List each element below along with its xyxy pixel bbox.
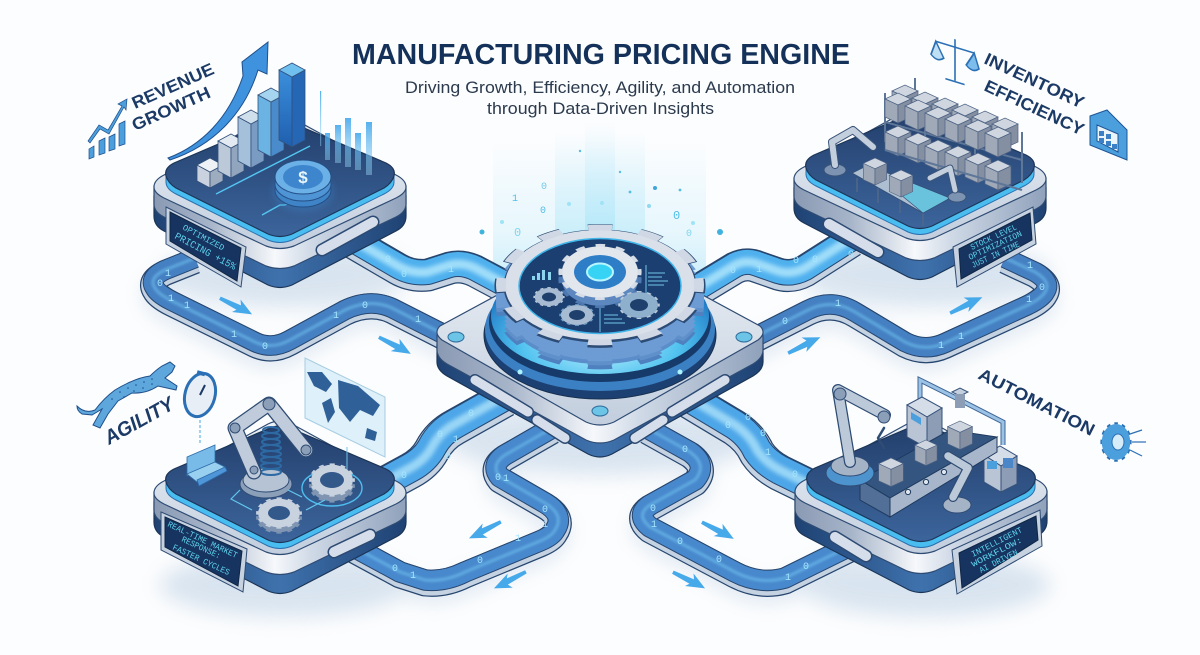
flow arrows	[217, 290, 985, 595]
binary digits flowing in pipes: 0	[157, 279, 163, 290]
binary digits flowing in pipes: 0	[682, 445, 688, 456]
robot arms	[824, 130, 966, 202]
heading: revenue growth: GROWTH	[129, 83, 213, 135]
binary digits flowing in pipes: 0	[803, 562, 809, 573]
label screen: real-time market	[161, 512, 247, 592]
data light column rising from the engine	[480, 120, 723, 305]
label screen: intelligent workflow: WORKFLOW:	[970, 535, 1024, 570]
robot arm with spring	[230, 398, 311, 498]
binary digits flowing in pipes: 1	[448, 265, 454, 276]
heading: inventory efficiency: EFFICIENCY	[981, 76, 1088, 140]
binary digits flowing in pipes: 0	[385, 255, 391, 266]
binary digits flowing in pipes: 0	[782, 317, 788, 328]
binary digits flowing in pipes: 1	[358, 241, 364, 252]
panel: inventory efficiency platform	[794, 78, 1046, 287]
pipe: revenue loop	[153, 258, 455, 349]
small gears	[534, 288, 659, 325]
label screen: intelligent workflow: AI DRIVEN	[978, 548, 1020, 576]
label screen: real-time market: REAL-TIME MARKET	[166, 520, 239, 561]
binary digits flowing in pipes: 0	[401, 471, 407, 482]
title: MANUFACTURING PRICING ENGINE	[352, 39, 850, 71]
binary digits flowing in pipes: 1	[333, 311, 339, 322]
heading: inventory efficiency: INVENTORY	[981, 49, 1088, 113]
heading: inventory efficiency	[981, 49, 1088, 140]
binary digits flowing in pipes: 1	[785, 573, 791, 584]
glowing circuit lines	[216, 146, 310, 215]
binary digits flowing in pipes: 1	[542, 520, 548, 531]
binary digits flowing in pipes: 0	[437, 430, 443, 441]
rising bar chart	[197, 63, 305, 188]
soft ground shadows	[153, 243, 1050, 617]
label screen: stock level: STOCK LEVEL	[969, 223, 1019, 253]
icon: stopwatch	[180, 370, 220, 445]
binary digits flowing in pipes: 1	[184, 301, 190, 312]
connector	[829, 224, 878, 252]
pipe: inventory feed	[697, 238, 852, 291]
data light column rising from the engine: 1	[512, 194, 518, 205]
binary digits flowing in pipes: 0	[677, 537, 683, 548]
label screen: stock level	[953, 207, 1036, 287]
pipe: revenue feed	[350, 238, 505, 287]
binary digits flowing in pipes: 0	[445, 452, 451, 463]
connector	[322, 222, 373, 250]
binary digits flowing in pipes: 1	[453, 435, 459, 446]
gears on platform	[231, 464, 362, 533]
label screen: optimized pricing	[166, 207, 246, 287]
heading: revenue growth	[129, 60, 217, 135]
central hub: pricing engine	[437, 227, 763, 457]
binary digits flowing in pipes: 1	[938, 341, 944, 352]
binary digits flowing in pipes: 0	[468, 409, 474, 420]
binary digits flowing in pipes: 0	[716, 555, 722, 566]
binary digits flowing in pipes: 1	[515, 534, 521, 545]
coin: $	[298, 168, 308, 187]
binary digits flowing in pipes: 1	[651, 520, 657, 531]
binary digits flowing in pipes: 1	[756, 265, 762, 276]
binary digits flowing in pipes: 1	[765, 448, 771, 459]
pipe: automation feed	[690, 398, 825, 495]
connector	[835, 537, 866, 556]
label screen: stock level: OPTIMIZATION	[967, 229, 1024, 263]
heading: automation: AUTOMATION	[975, 365, 1098, 440]
icon: balance scale	[931, 32, 979, 89]
pipe: agility loop	[352, 428, 558, 583]
binary digits flowing in pipes: 0	[848, 250, 854, 261]
binary digits flowing in pipes: 1	[958, 332, 964, 343]
glowing dome	[484, 258, 716, 399]
binary digits flowing in pipes: 0	[725, 421, 731, 432]
icon: warehouse	[1090, 110, 1127, 160]
panel: revenue growth platform	[154, 42, 406, 288]
pipe connectors on hub	[475, 380, 725, 438]
binary digits flowing in pipes: 0	[792, 470, 798, 481]
binary digits flowing in pipes: 1	[415, 315, 421, 326]
label screen: real-time market: RESPONSE:	[180, 535, 222, 561]
robot arm right	[943, 456, 971, 513]
data light column rising from the engine: 0	[540, 206, 546, 217]
binary digits flowing in pipes	[157, 241, 1045, 584]
binary digits flowing in pipes: 0	[812, 255, 818, 266]
binary digits flowing in pipes: 0	[262, 342, 268, 353]
subtitle	[405, 78, 795, 118]
data light column rising from the engine: 0	[686, 229, 692, 240]
binary digits flowing in pipes: 0	[650, 504, 656, 515]
binary digits flowing in pipes: 1	[503, 474, 509, 485]
binary digits flowing in pipes: 0	[760, 429, 766, 440]
icon: growth chart	[88, 99, 127, 159]
heading: revenue growth: REVENUE	[129, 60, 217, 113]
binary digits flowing in pipes: 1	[835, 299, 841, 310]
binary digits flowing in pipes: 0	[392, 564, 398, 575]
binary digits flowing in pipes: 0	[362, 301, 368, 312]
assembly line conveyor	[860, 421, 997, 517]
mini bar chart	[320, 91, 372, 175]
heading: agility: AGILITY	[100, 393, 179, 450]
label screen: real-time market: FASTER CYCLES	[171, 543, 231, 578]
coin	[273, 160, 333, 211]
icon: cheetah	[77, 362, 177, 428]
binary digits flowing in pipes: 0	[745, 413, 751, 424]
subtitle: Driving Growth, Efficiency, Agility, and Automation	[405, 78, 795, 97]
binary digits flowing in pipes: 1	[410, 571, 416, 582]
robot arm left	[826, 388, 890, 486]
hub base plate	[437, 243, 763, 457]
binary digits flowing in pipes: 0	[495, 473, 501, 484]
panel: agility platform	[154, 358, 406, 594]
inner gear	[560, 245, 640, 307]
dashboard inside gear	[532, 265, 668, 332]
panel: automation platform	[795, 380, 1047, 594]
blue data blocks	[187, 445, 227, 486]
data pipes: serpentine channels	[153, 238, 1047, 583]
connector	[334, 535, 370, 552]
label screen: intelligent workflow: INTELLIGENT	[970, 525, 1024, 560]
binary digits flowing in pipes: 1	[1027, 261, 1033, 272]
subtitle: through Data-Driven Insights	[487, 99, 714, 118]
binary digits flowing in pipes: 0	[730, 266, 736, 277]
binary digits flowing in pipes: 0	[1039, 283, 1045, 294]
data light column rising from the engine: 0	[514, 226, 521, 240]
data light column rising from the engine: 0	[673, 209, 680, 223]
warehouse rack	[885, 78, 1022, 190]
binary digits flowing in pipes: 1	[165, 269, 171, 280]
label screen: intelligent workflow	[952, 510, 1042, 594]
data light column rising from the engine: 0	[541, 182, 547, 193]
label screen: optimized pricing: OPTIMIZED	[181, 223, 226, 253]
control units and pipe	[907, 380, 1017, 492]
pipe: agility feed	[375, 396, 505, 490]
binary digits flowing in pipes: 0	[401, 270, 407, 281]
binary digits flowing in pipes: 0	[477, 556, 483, 567]
binary digits flowing in pipes: 0	[793, 256, 799, 267]
binary digits flowing in pipes: 1	[231, 330, 237, 341]
label screen: stock level: JUST IN TIME	[970, 240, 1021, 271]
growth arrow	[168, 42, 268, 160]
icon: automation gear	[1101, 423, 1146, 461]
binary digits flowing in pipes: 0	[542, 505, 548, 516]
binary digits flowing in pipes: 1	[1026, 295, 1032, 306]
main gear	[500, 227, 700, 366]
pipe: inventory loop	[745, 258, 1047, 350]
conveyor belt	[852, 158, 950, 226]
pipe: automation loop	[642, 428, 850, 583]
binary digits flowing in pipes: 1	[168, 294, 174, 305]
label screen: optimized pricing: PRICING +15%	[172, 232, 237, 273]
world map card	[305, 358, 385, 475]
